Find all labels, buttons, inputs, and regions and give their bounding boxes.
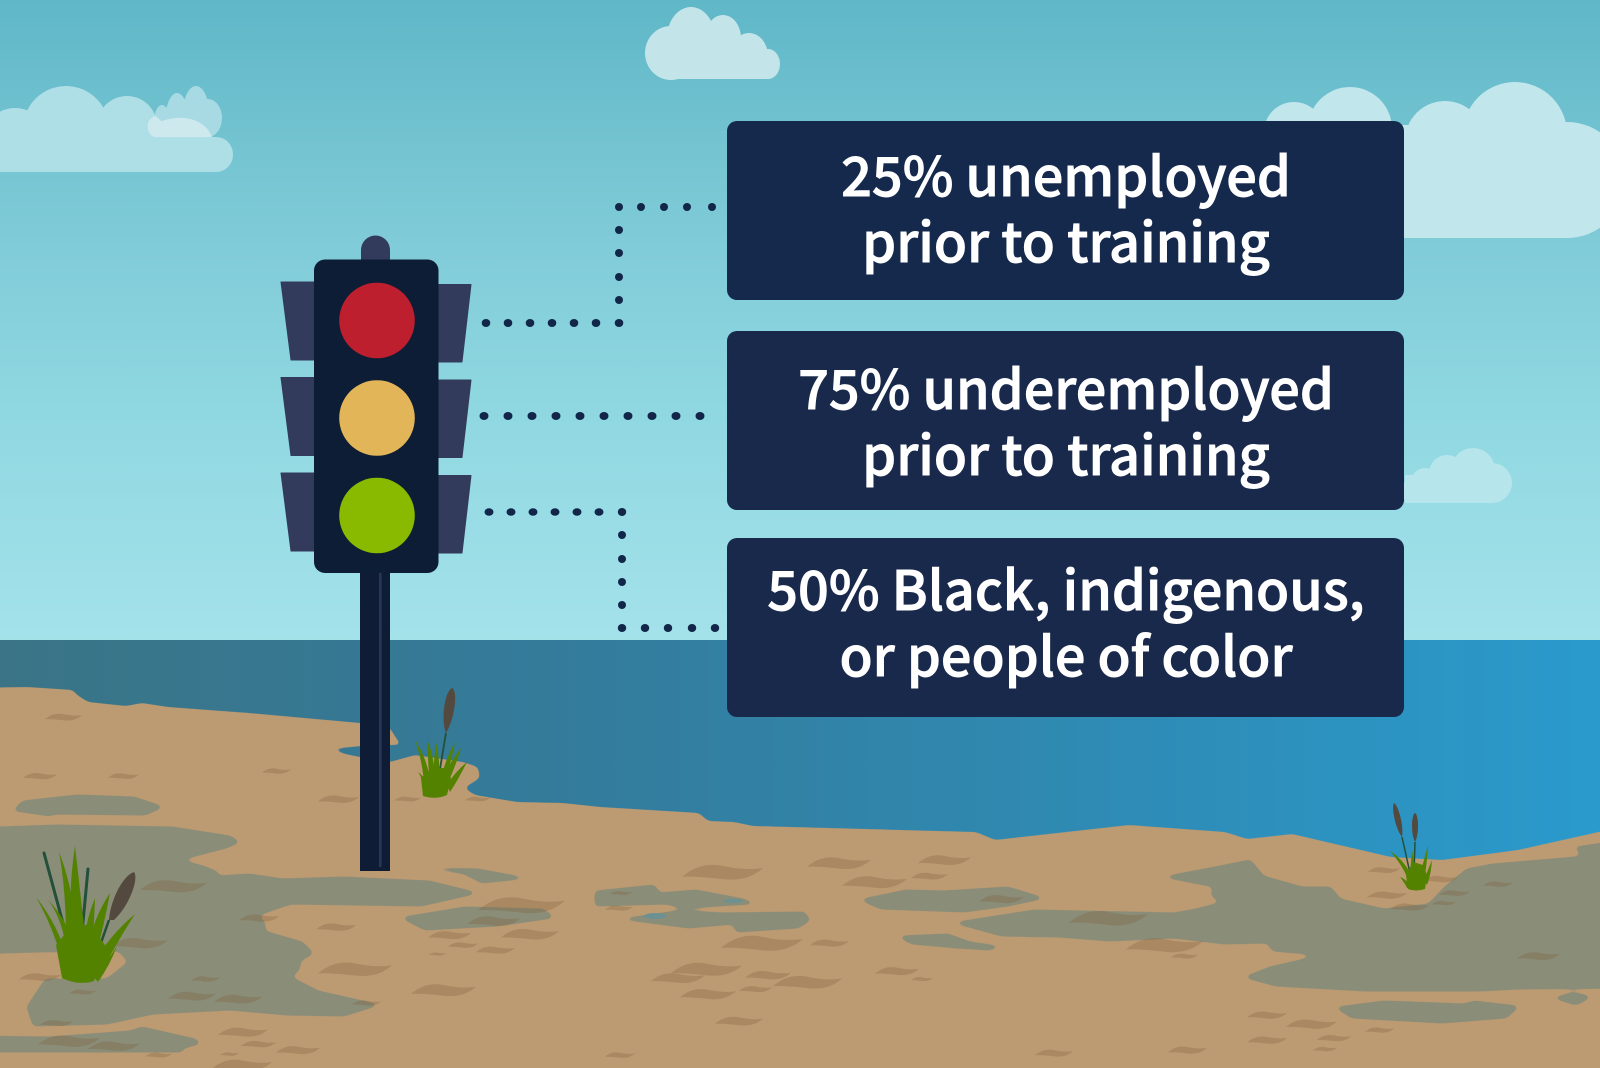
red light [339, 283, 415, 358]
sky background [0, 0, 1600, 642]
plant: left large reeds [36, 846, 135, 983]
water puddle spots [644, 899, 743, 919]
housing [314, 260, 438, 573]
callout text: prior to training [862, 412, 1270, 491]
cloud: left [0, 86, 233, 172]
connector dots: middle box [480, 412, 704, 420]
amber light [339, 380, 415, 456]
callout text: 25% unemployed [841, 133, 1291, 212]
sea [0, 640, 1600, 900]
right visors [436, 284, 471, 553]
top cap [361, 236, 390, 262]
cloud: left overlap highlight [148, 116, 212, 137]
callout text: or people of color [839, 613, 1293, 692]
plant: centre reeds [415, 688, 467, 798]
plant: right reeds [1390, 803, 1432, 890]
sand beach [0, 687, 1600, 1068]
sand ripples [19, 714, 1560, 1068]
connector dots: bottom box [484, 508, 719, 632]
cloud: top centre [645, 7, 780, 80]
callout box: 50% Black, indigenous, or people of color [727, 538, 1404, 717]
pole [360, 570, 390, 871]
callout text: 75% underemployed [798, 346, 1334, 425]
callout text: prior to training [862, 199, 1270, 278]
cloud: lower right [1400, 448, 1512, 503]
left visors [281, 282, 316, 551]
callout box: 25% unemployed [727, 121, 1404, 300]
callout text: 50% Black, indigenous, [767, 547, 1365, 626]
traffic light [281, 236, 471, 871]
connector dots: top box [482, 203, 716, 327]
cloud: small behind left [154, 86, 222, 151]
green light [339, 478, 415, 553]
wet sand patches [0, 796, 1600, 1051]
callout box: 75% underemployed [727, 331, 1404, 510]
cloud: upper right [1264, 82, 1600, 238]
